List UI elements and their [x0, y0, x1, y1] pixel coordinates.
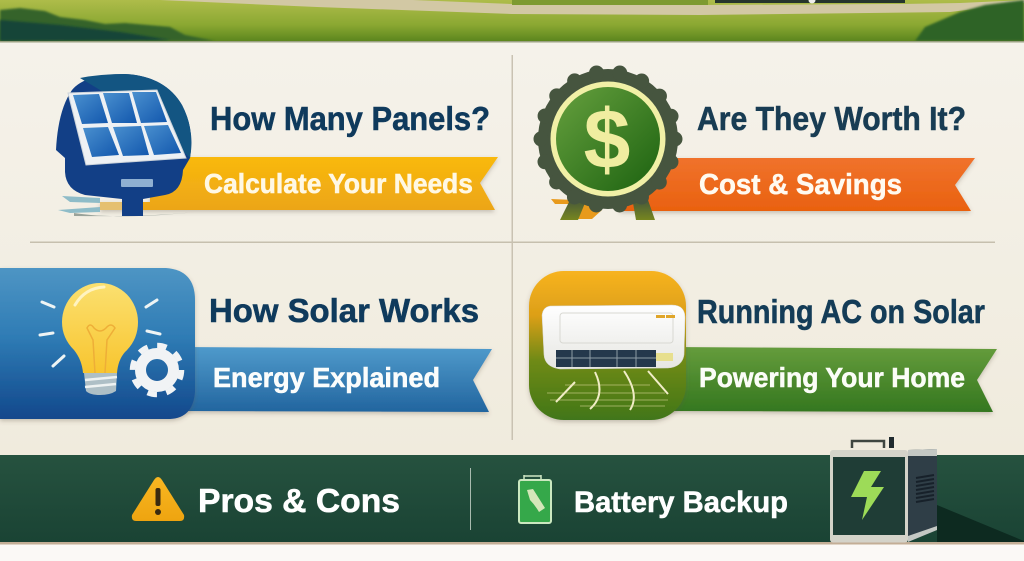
dollar sign: $	[584, 92, 630, 186]
icon: battery unit	[830, 437, 937, 542]
gear	[132, 346, 182, 394]
ribbon: energy explained	[180, 347, 492, 412]
heading: how solar works: How Solar Works	[209, 292, 479, 329]
panel: running ac on solar	[529, 271, 997, 420]
icon: solar panel	[56, 74, 195, 216]
ribbon: powering your home	[670, 347, 997, 412]
ribbon label: calculate your needs: Calculate Your Needs	[204, 168, 473, 199]
icon: battery	[519, 475, 551, 523]
heading: running ac on solar: Running AC on Solar	[697, 293, 985, 330]
icon: air conditioner	[529, 271, 686, 420]
ribbon label: energy explained: Energy Explained	[213, 362, 440, 393]
icon: dollar badge	[538, 69, 678, 220]
bottom bar	[0, 437, 1024, 544]
ribbon: calculate your needs	[100, 157, 498, 210]
cream content panel	[0, 41, 1024, 455]
ribbon label: powering your home: Powering Your Home	[699, 362, 965, 393]
grass landscape strip	[0, 0, 1024, 41]
icon: light bulb and gear	[0, 268, 195, 419]
ribbon: cost and savings	[620, 158, 975, 211]
label: pros and cons: Pros & Cons	[198, 482, 400, 519]
ribbon label: cost and savings: Cost & Savings	[699, 169, 902, 201]
icon: warning triangle	[132, 477, 184, 521]
panel: are they worth it	[538, 69, 975, 220]
panel: how solar works	[0, 268, 492, 419]
label: battery backup: Battery Backup	[574, 486, 788, 519]
heading: how many panels: How Many Panels?	[210, 100, 490, 137]
panel: how many panels	[56, 74, 498, 216]
heading: are they worth it: Are They Worth It?	[697, 100, 966, 137]
